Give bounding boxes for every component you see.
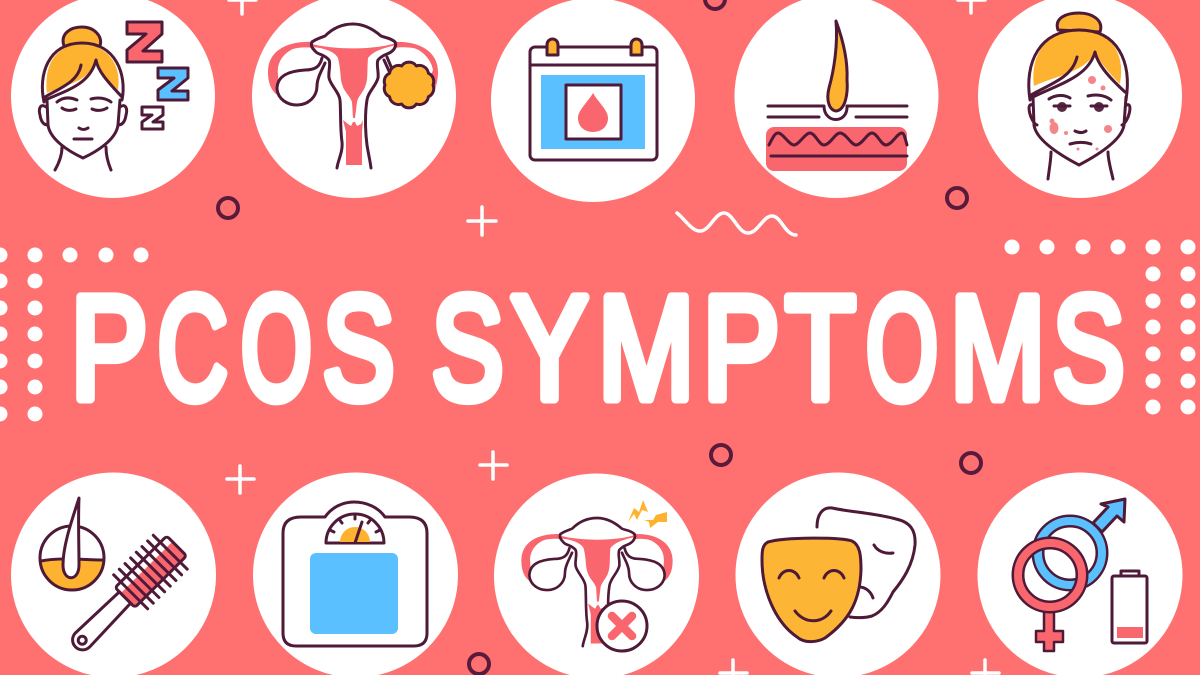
decorative wave (677, 213, 796, 235)
icon: calendar with blood drop (491, 0, 695, 202)
icon: gender symbols and low battery (978, 472, 1182, 675)
title: P (71, 266, 148, 431)
title: Y (511, 266, 588, 431)
icon: sleepy face with zzz (11, 0, 215, 198)
title: S (432, 266, 504, 430)
icon: weighing scale (253, 472, 458, 675)
icon: hair loss and brush (11, 472, 216, 675)
icon: uterus with cyst (252, 0, 456, 198)
icon: face with acne (978, 0, 1182, 198)
title: O (866, 267, 938, 431)
title: M (950, 266, 1045, 430)
title: T (785, 266, 856, 431)
dot pattern left (0, 248, 148, 422)
decorative dark rings (218, 0, 981, 674)
icon: two masks for mood swings (736, 472, 940, 675)
title: O (241, 265, 312, 430)
title: S (323, 266, 395, 430)
title: P (703, 266, 780, 431)
title: M (598, 266, 695, 431)
title (71, 265, 1125, 431)
title: S (1053, 266, 1125, 430)
title: C (158, 266, 228, 430)
decorative white plus signs (227, 0, 999, 675)
icon: hair follicle in skin (734, 0, 938, 198)
icon: uterus with pain and cross (494, 474, 699, 675)
dot pattern right (1004, 240, 1196, 414)
